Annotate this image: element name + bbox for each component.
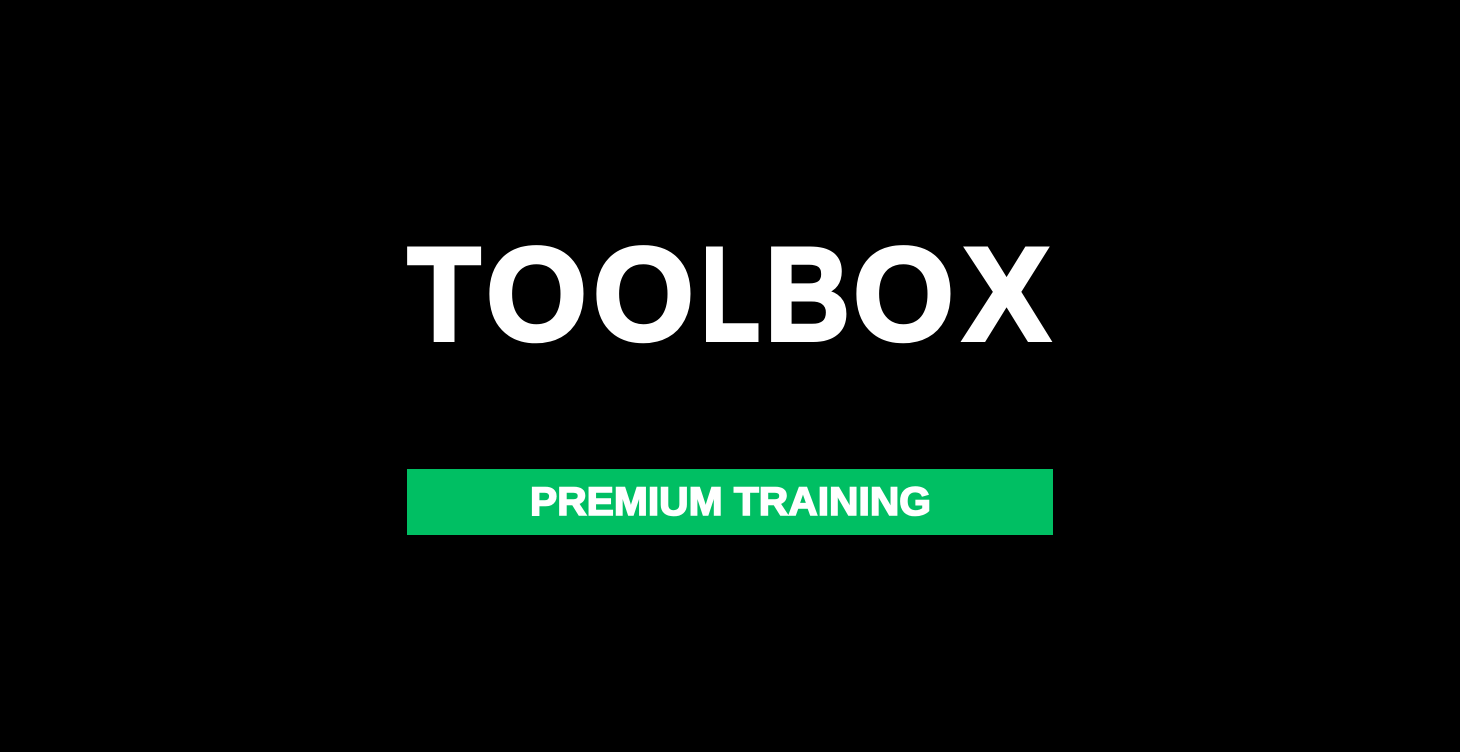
banner label: PREMIUM TRAINING [530,480,931,524]
title: O [593,221,694,369]
title: T [408,221,481,369]
banner: premium training [407,469,1053,535]
title: B [765,221,850,369]
title: O [853,221,954,369]
title: O [486,221,587,369]
title: X [963,221,1050,369]
title: L [701,221,760,369]
